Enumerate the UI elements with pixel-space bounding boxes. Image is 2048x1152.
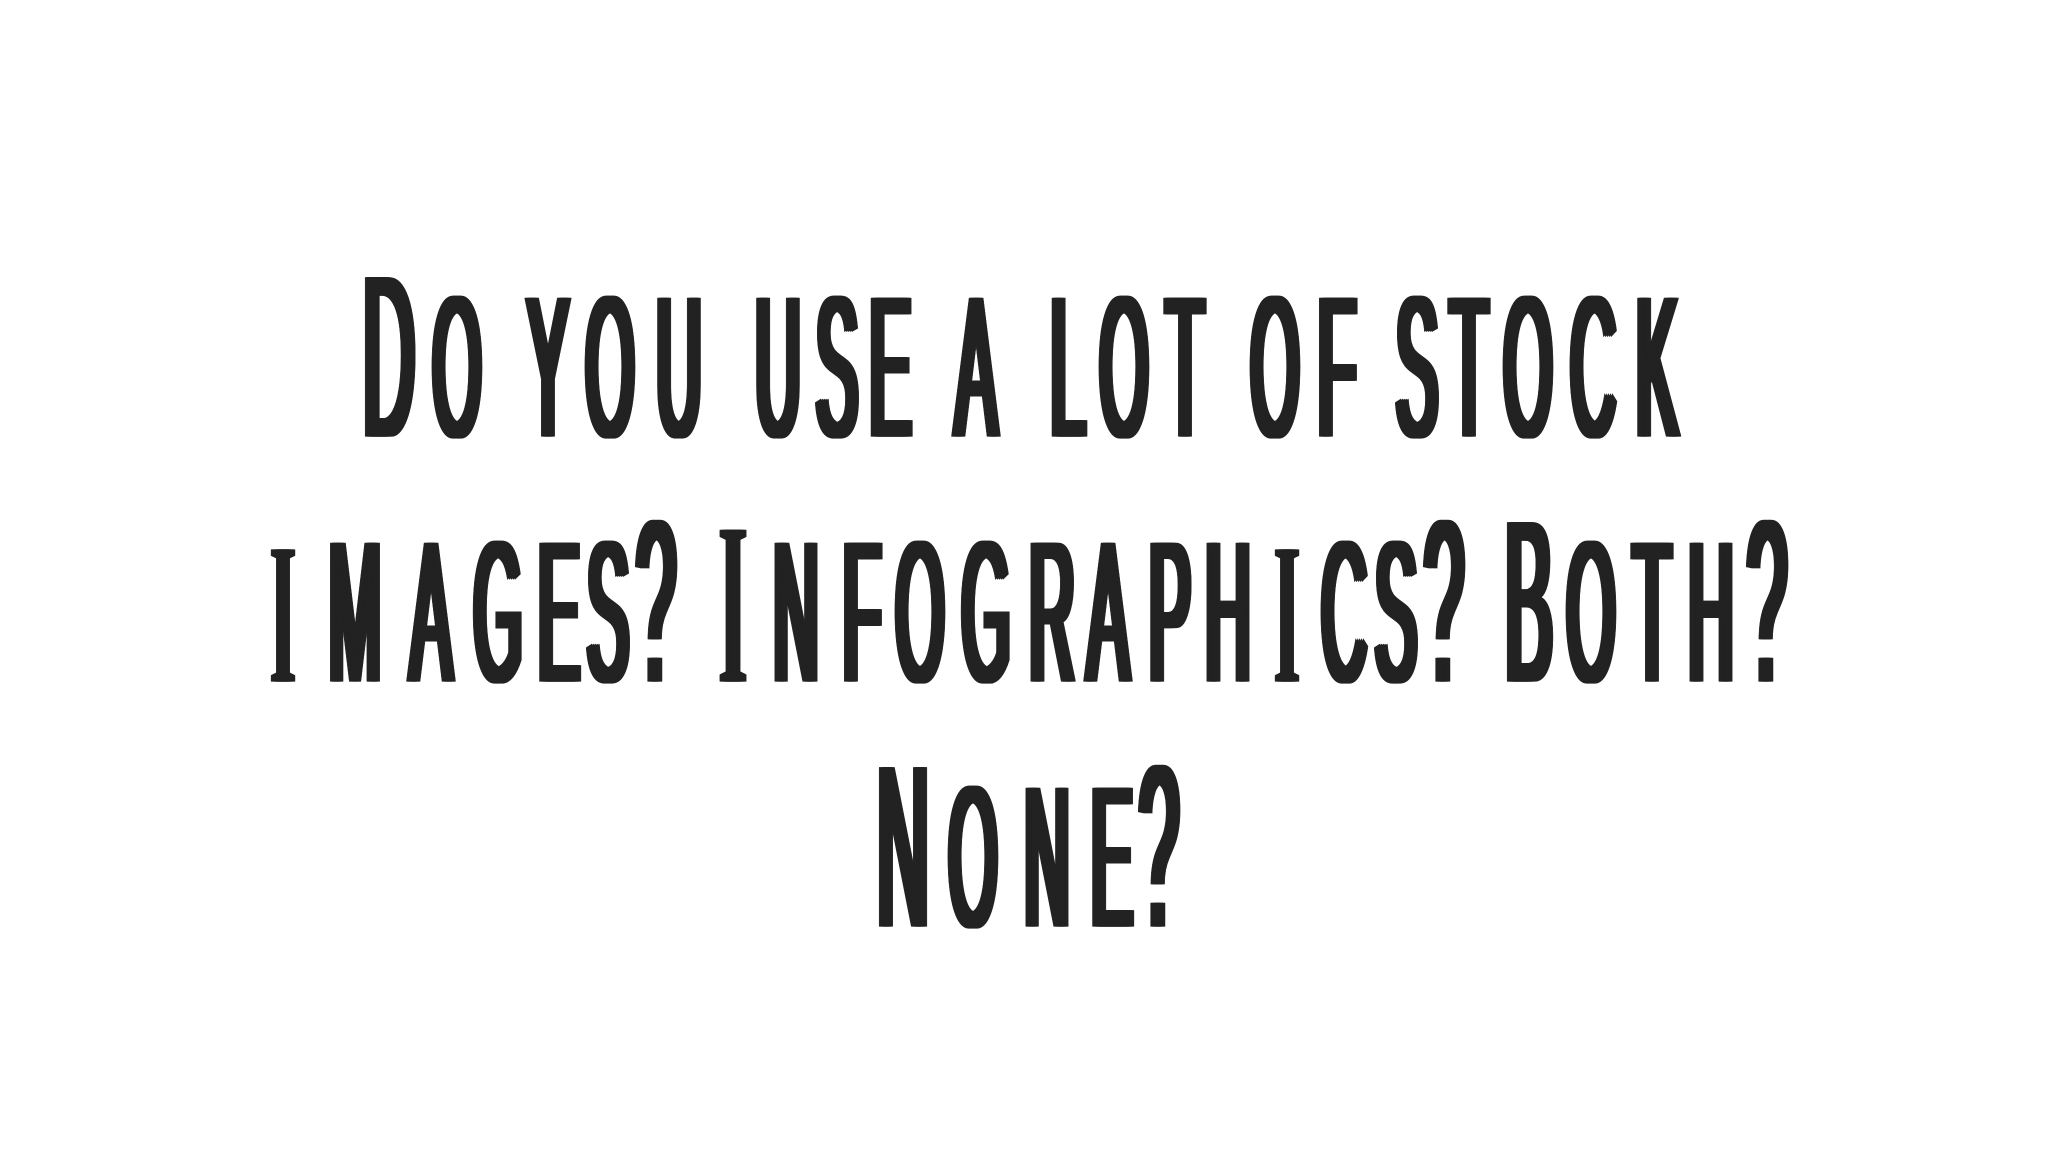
title line 2: IMAGES? INFOGRAPHICS? BOTH? <box>273 474 1787 731</box>
title line 3: NONE? <box>877 719 1179 976</box>
title line 1: DO YOU USE A LOT OF STOCK <box>363 229 1678 486</box>
